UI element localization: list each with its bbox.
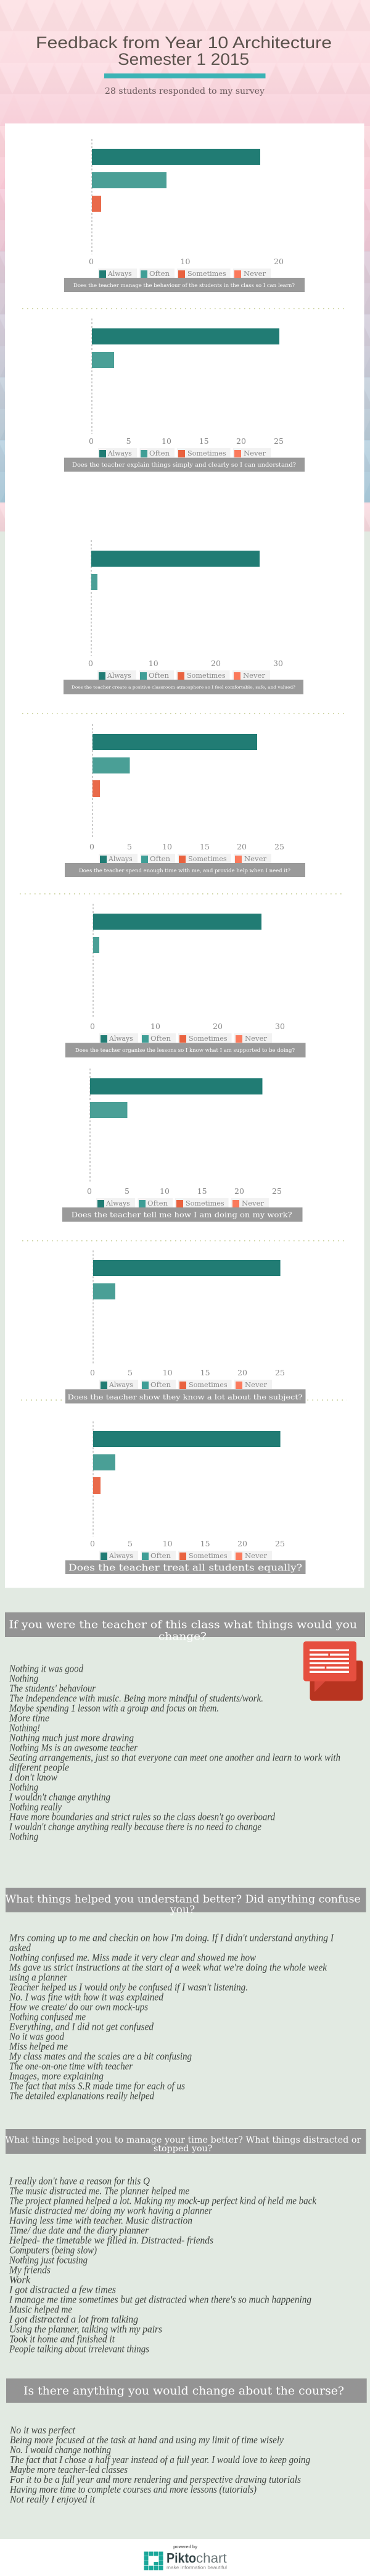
subtitle: 28 students responded to my survey [105, 86, 265, 96]
chart 6: how I am doing [62, 1069, 302, 1222]
chart 6: how I am doing: 20 [234, 1186, 244, 1196]
text block: understanding answers: asked [9, 1942, 31, 1953]
chart 1: behaviour: Always [107, 269, 132, 278]
chart 3: positive atmosphere: Sometimes [187, 671, 226, 680]
text block: time management answers [9, 2175, 316, 2354]
chart 3: positive atmosphere: 0 [88, 659, 93, 668]
text block: time management answers: Helped- the timetable we filled in. Distracted- friends [9, 2235, 213, 2246]
chart 4: enough time: Often [150, 854, 171, 863]
text block: understanding answers: The detailed explanations really helped [9, 2090, 154, 2101]
chart 3: positive atmosphere: Always [107, 671, 131, 680]
chart 3: positive atmosphere [64, 540, 303, 694]
text block: teacher of this class answers: Nothing [9, 1673, 38, 1684]
chart 5: organise lessons [65, 904, 306, 1057]
chart 7: knowledge of subject: 0 [90, 1368, 95, 1377]
chart 7: knowledge of subject: Never [245, 1380, 268, 1389]
chart 7: knowledge of subject: 20 [237, 1368, 247, 1377]
chart 2: explain things: 20 [236, 436, 246, 446]
chart 2: explain things: Sometimes [187, 449, 226, 457]
text block: teacher of this class answers: Nothing it was good [9, 1663, 83, 1674]
text block: understanding answers: The fact that miss S.R made time for each of us [9, 2080, 185, 2091]
chart 8: treat equally: 5 [128, 1539, 133, 1548]
text block: course change answers: Maybe more teacher-led classes [9, 2464, 128, 2475]
chart 8: treat equally: 0 [90, 1539, 95, 1548]
text block: teacher of this class answers: Nothing Ms is an awesome teacher [9, 1742, 138, 1753]
chart 8: treat equally: 15 [200, 1539, 210, 1548]
chart 8: treat equally: Does the teacher treat all students equally? [68, 1562, 302, 1573]
chart 7: knowledge of subject: 25 [275, 1368, 285, 1377]
chart 2: explain things: 0 [89, 436, 94, 446]
text block: teacher of this class answers: Nothing [9, 1831, 38, 1842]
chart 4: enough time: 25 [274, 842, 284, 851]
text block: teacher of this class answers: Nothing! [9, 1722, 40, 1733]
chart 3: positive atmosphere: Does the teacher create a positive classroom atmosphere so I feel comfortable, safe, and valued? [72, 685, 296, 690]
text block: course change answers [9, 2424, 310, 2505]
heading: change about the course: Is there anything you would change about the course? [23, 2385, 344, 2398]
chart 7: knowledge of subject: Often [150, 1380, 171, 1389]
text block: time management answers: Work [9, 2274, 30, 2285]
text block: teacher of this class answers: Nothing really [9, 1801, 62, 1812]
text block: teacher of this class answers: I wouldn't change anything [9, 1791, 110, 1803]
heading: change about the course [6, 2378, 367, 2403]
text block: time management answers: My friends [9, 2264, 51, 2275]
text block: understanding answers: How we create/ do our own mock-ups [9, 2001, 148, 2012]
heading: manage your time [5, 2129, 366, 2154]
chart 5: organise lessons: Always [109, 1034, 133, 1043]
text block: time management answers: Music helped me [9, 2304, 72, 2315]
chart 8: treat equally: Always [109, 1551, 133, 1560]
text block: understanding answers: Nothing confused me. Miss made it very clear and showed me how [9, 1952, 257, 1963]
chart 7: knowledge of subject: 10 [163, 1368, 173, 1377]
chart 2: explain things: Always [107, 449, 132, 457]
chart 8: treat equally: 20 [237, 1539, 247, 1548]
text block: time management answers: I manage me time sometimes but get distracted when there's so much happening [9, 2294, 311, 2305]
text block: course change answers: The fact that I chose a half year instead of a full year. I would love to keep going [10, 2454, 310, 2466]
footer: Piktochart logo: chart [196, 2551, 227, 2566]
chart 2: explain things: 10 [162, 436, 171, 446]
chart 1: behaviour: Sometimes [187, 269, 226, 278]
text block: teacher of this class answers: Nothing much just more drawing [9, 1732, 134, 1743]
text block: teacher of this class answers: Nothing [9, 1782, 38, 1793]
text block: understanding answers: Ms gave us strict instructions at the start of a week what we're doing the whole week [9, 1962, 327, 1973]
chart 6: how I am doing: 5 [125, 1186, 130, 1196]
text block: teacher of this class answers: Have more boundaries and strict rules so the class doesn't go overboard [9, 1811, 275, 1822]
chart 2: explain things: 15 [199, 436, 209, 446]
chart 4: enough time: 10 [162, 842, 172, 851]
footer: Piktochart logo [144, 2544, 227, 2570]
text block: time management answers: People talking about irrelevant things [9, 2343, 149, 2354]
text block: understanding answers: My class mates and the scales are a bit confusing [9, 2051, 192, 2062]
text block: time management answers: Nothing just focusing [9, 2254, 88, 2265]
chart 2: explain things: Never [244, 449, 266, 457]
text block: understanding answers: Teacher helped us I would only be confused if I wasn't listening. [9, 1982, 248, 1993]
text block: time management answers: I got distracted a lot from talking [9, 2314, 138, 2325]
chart 4: enough time: 20 [237, 842, 247, 851]
chart 4: enough time: Never [244, 854, 267, 863]
heading: what helped you understand: What things helped you understand better? Did anything confuse [5, 1893, 361, 1906]
text block: time management answers: Using the planner, talking with my pairs [9, 2324, 162, 2335]
chart 7: knowledge of subject: 15 [200, 1368, 210, 1377]
heading: manage your time: stopped you? [154, 2144, 212, 2154]
chart 7: knowledge of subject: Always [109, 1380, 133, 1389]
text block: understanding answers [9, 1932, 334, 2101]
title underline bar [104, 73, 265, 78]
text block: understanding answers: Miss helped me [9, 2041, 68, 2052]
chart 8: treat equally: 10 [163, 1539, 173, 1548]
text block: understanding answers: No. I was fine with how it was explained [9, 1991, 163, 2003]
chart 1: behaviour [64, 139, 305, 292]
chart 6: how I am doing: Always [105, 1199, 130, 1207]
chart 4: enough time: 0 [89, 842, 94, 851]
chart 5: organise lessons: 20 [213, 1022, 223, 1031]
text block: teacher of this class answers: I don't know [9, 1772, 58, 1783]
text block: time management answers: I really don't have a reason for this Q [9, 2175, 150, 2186]
title: Feedback from Year 10 Architecture [36, 33, 332, 52]
footer: Piktochart logo: Pikto [166, 2551, 196, 2566]
text block: understanding answers: No it was good [9, 2031, 64, 2042]
text block: time management answers: Having less time with teacher. Music distraction [9, 2215, 192, 2226]
chart 7: knowledge of subject [65, 1251, 306, 1404]
text block: time management answers: Took it home and finished it [9, 2333, 115, 2345]
chart 6: how I am doing: Sometimes [186, 1199, 224, 1207]
text block: teacher of this class answers: The independence with music. Being more mindful of students/work. [9, 1693, 263, 1704]
chart 7: knowledge of subject: Does the teacher show they know a lot about the subject? [68, 1393, 302, 1401]
title [36, 33, 332, 69]
chart 6: how I am doing: 0 [87, 1186, 92, 1196]
chart 3: positive atmosphere: Often [149, 671, 170, 680]
text block: course change answers: Being more focused at the task at hand and using my limit of time wisely [10, 2434, 284, 2446]
chart 5: organise lessons: 0 [90, 1022, 95, 1031]
heading: what helped you understand: you? [170, 1904, 195, 1916]
text block: course change answers: No it was perfect [9, 2424, 76, 2436]
chart 5: organise lessons: Often [150, 1034, 171, 1043]
text block: course change answers: Having more time to complete courses and more lessons (tutorials) [9, 2483, 257, 2495]
chart 6: how I am doing: Often [147, 1199, 168, 1207]
chart 4: enough time: Does the teacher spend enough time with me, and provide help when I need it? [79, 868, 290, 874]
chart 6: how I am doing: Does the teacher tell me how I am doing on my work? [72, 1211, 292, 1219]
chart 5: organise lessons: 10 [150, 1022, 160, 1031]
text block: course change answers: Not really I enjoyed it [9, 2493, 96, 2505]
chart 2: explain things: 5 [126, 436, 131, 446]
text block: course change answers: No. I would change nothing [9, 2444, 111, 2456]
chart 1: behaviour: 0 [89, 257, 94, 266]
chart 4: enough time: Sometimes [188, 854, 227, 863]
text block: time management answers: Computers (being slow) [9, 2245, 97, 2256]
chart 1: behaviour: Never [244, 269, 266, 278]
heading: if you were the teacher: change? [158, 1631, 207, 1643]
chart 1: behaviour: 20 [274, 257, 284, 266]
text block: time management answers: Music distracted me/ doing my work having a planner [9, 2205, 212, 2216]
chart 2: explain things: 25 [274, 436, 284, 446]
chart 8: treat equally [65, 1421, 306, 1574]
text block: teacher of this class answers: different people [9, 1762, 69, 1773]
text block: time management answers: Time/ due date and the diary planner [9, 2225, 149, 2236]
chart 2: explain things: Often [149, 449, 170, 457]
chart 7: knowledge of subject: Sometimes [189, 1380, 228, 1389]
text block: teacher of this class answers: Maybe spending 1 lesson with a group and focus on them. [9, 1703, 219, 1714]
chart 8: treat equally: Sometimes [189, 1551, 228, 1560]
chart 1: behaviour: Does the teacher manage the behaviour of the students in the class so I can learn? [73, 283, 295, 289]
chart 6: how I am doing: 25 [272, 1186, 282, 1196]
text block: time management answers: I got distracted a few times [9, 2284, 116, 2295]
icon: speech bubbles [303, 1641, 363, 1701]
chart 6: how I am doing: 15 [197, 1186, 207, 1196]
text block: time management answers: The music distracted me. The planner helped me [9, 2185, 189, 2196]
title: Semester 1 2015 [118, 50, 249, 69]
chart 4: enough time: 15 [200, 842, 210, 851]
heading: what helped you understand [5, 1888, 366, 1916]
chart 5: organise lessons: Sometimes [189, 1034, 228, 1043]
chart 7: knowledge of subject: 5 [128, 1368, 133, 1377]
text block: understanding answers: Mrs coming up to me and checkin on how I'm doing. If I didn't understand anything I [9, 1932, 334, 1943]
chart 5: organise lessons: Does the teacher organise the lessons so I know what I am supported to be doing? [75, 1048, 295, 1054]
chart 8: treat equally: Often [150, 1551, 171, 1560]
chart 3: positive atmosphere: Never [243, 671, 266, 680]
text block: understanding answers: Images, more explaining [9, 2070, 104, 2082]
text block: understanding answers: Everything, and I did not get confused [9, 2021, 154, 2032]
text block: time management answers: The project planned helped a lot. Making my mock-up perfect kind of held me back [9, 2195, 316, 2206]
chart 5: organise lessons: 30 [275, 1022, 285, 1031]
footer: Piktochart logo: powered by [173, 2544, 198, 2549]
chart 5: organise lessons: Never [245, 1034, 268, 1043]
text block: teacher of this class answers: The students' behaviour [9, 1683, 96, 1694]
chart 6: how I am doing: 10 [160, 1186, 170, 1196]
chart 8: treat equally: Never [245, 1551, 268, 1560]
text block: understanding answers: Nothing confused me [9, 2011, 86, 2022]
chart 4: enough time [65, 724, 305, 877]
heading: manage your time: What things helped you to manage your time better? What things distracted or [5, 2135, 361, 2145]
text block: course change answers: For it to be a full year and more rendering and perspective drawing tutorials [9, 2474, 301, 2485]
footer: Piktochart logo: make information beautiful [166, 2564, 227, 2570]
chart 1: behaviour: Often [149, 269, 170, 278]
chart 4: enough time: Always [108, 854, 133, 863]
chart 4: enough time: 5 [127, 842, 132, 851]
chart 2: explain things [64, 319, 305, 472]
text block: understanding answers: The one-on-one time with teacher [9, 2061, 133, 2072]
chart 3: positive atmosphere: 20 [211, 659, 221, 668]
text block: teacher of this class answers: I wouldn't change anything really because there is no need to change [9, 1821, 261, 1832]
chart 3: positive atmosphere: 10 [149, 659, 158, 668]
heading: if you were the teacher: If you were the teacher of this class what things would you [9, 1619, 357, 1631]
chart 6: how I am doing: Never [242, 1199, 265, 1207]
chart 3: positive atmosphere: 30 [273, 659, 283, 668]
chart 8: treat equally: 25 [275, 1539, 285, 1548]
text block: understanding answers: using a planner [9, 1972, 67, 1983]
chart 2: explain things: Does the teacher explain things simply and clearly so I can understand? [72, 462, 296, 469]
text block: teacher of this class answers: More time [9, 1712, 49, 1724]
heading: if you were the teacher [5, 1612, 365, 1643]
panel: survey charts [5, 123, 364, 1588]
chart 1: behaviour: 10 [181, 257, 190, 266]
text block: teacher of this class answers [9, 1663, 340, 1842]
